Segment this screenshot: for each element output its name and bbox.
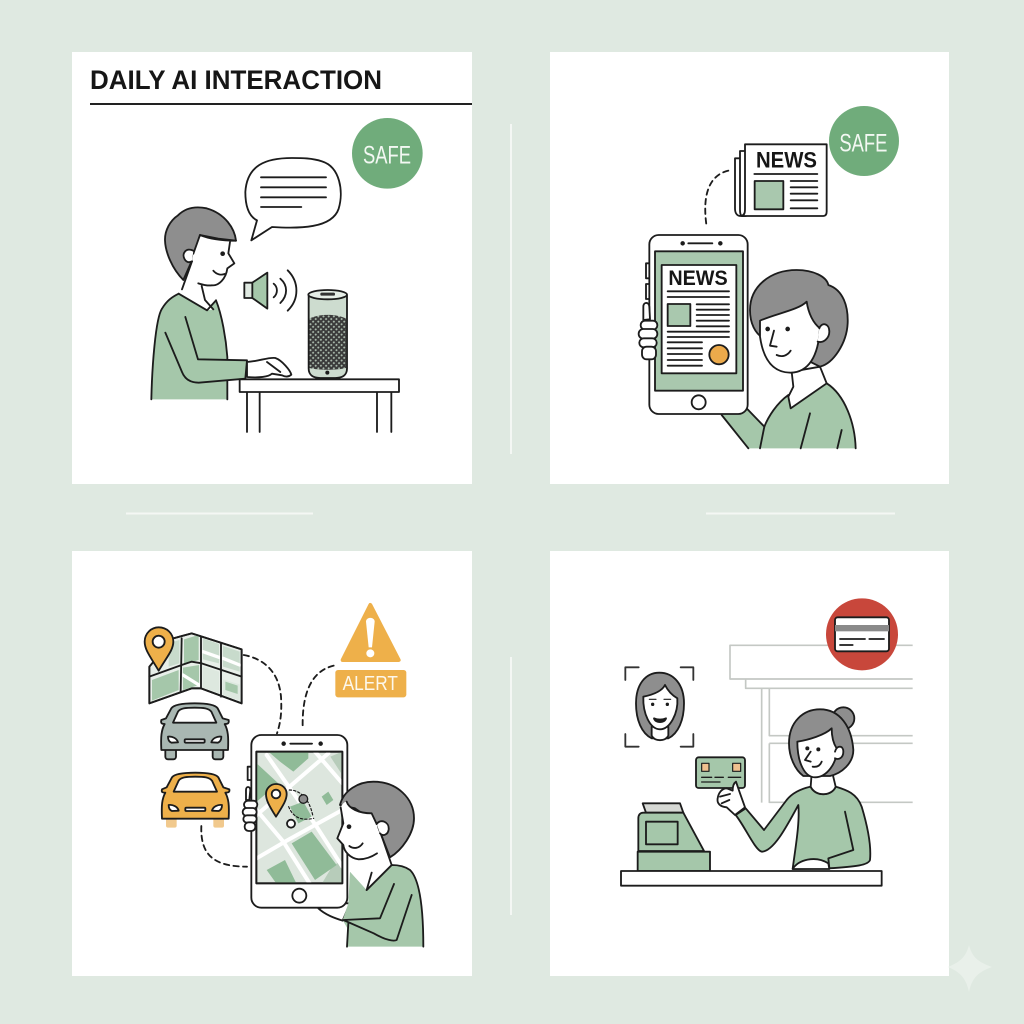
icon: speaker with sound waves: [244, 270, 296, 311]
person: [151, 207, 291, 399]
hand holding phone: [639, 303, 657, 359]
illustration: person reading news: [639, 106, 899, 448]
panel: news on phone: [550, 52, 949, 484]
icon: orange car: [162, 773, 229, 828]
person: [337, 782, 423, 947]
counter: [621, 871, 882, 886]
speech bubble: [245, 158, 341, 240]
hand holding phone: [243, 787, 257, 831]
hand behind phone: [318, 903, 350, 921]
icon: grey car: [161, 703, 229, 759]
table: [240, 379, 399, 432]
icon: alert triangle: [343, 605, 399, 660]
illustration: face recognition payment: [621, 598, 913, 886]
badge: safe: SAFE: [839, 130, 887, 157]
illustration: navigation map and cars: [145, 605, 423, 947]
title: DAILY AI INTERACTION: [90, 65, 382, 95]
illustration: person with smart speaker: [151, 118, 423, 432]
sparkle mark: [948, 945, 992, 992]
phone with news: NEWS: [668, 266, 728, 290]
dashed connector: [705, 171, 728, 227]
icon: newspaper: NEWS: [756, 147, 817, 172]
dashed connectors: [201, 655, 334, 867]
badge: safe: SAFE: [363, 143, 411, 170]
smart speaker device: [308, 290, 347, 378]
phone with news: [646, 235, 748, 414]
panel: voice assistant: [72, 52, 472, 484]
badge: safe: [352, 118, 423, 189]
cash register: [638, 803, 710, 871]
person: [717, 707, 870, 869]
alert label: ALERT: [343, 672, 398, 695]
icon: newspaper: [735, 144, 827, 216]
phone with map: [248, 735, 347, 908]
panel: payment: [550, 551, 949, 976]
background shelves: [730, 645, 913, 803]
panel: navigation: [72, 551, 472, 976]
person: [722, 270, 856, 448]
icon: folded map with pin: [145, 627, 242, 703]
card in hand: [696, 757, 745, 788]
icon: face scan: [625, 667, 693, 747]
badge: safe: [829, 106, 899, 176]
badge: card: [826, 598, 898, 670]
